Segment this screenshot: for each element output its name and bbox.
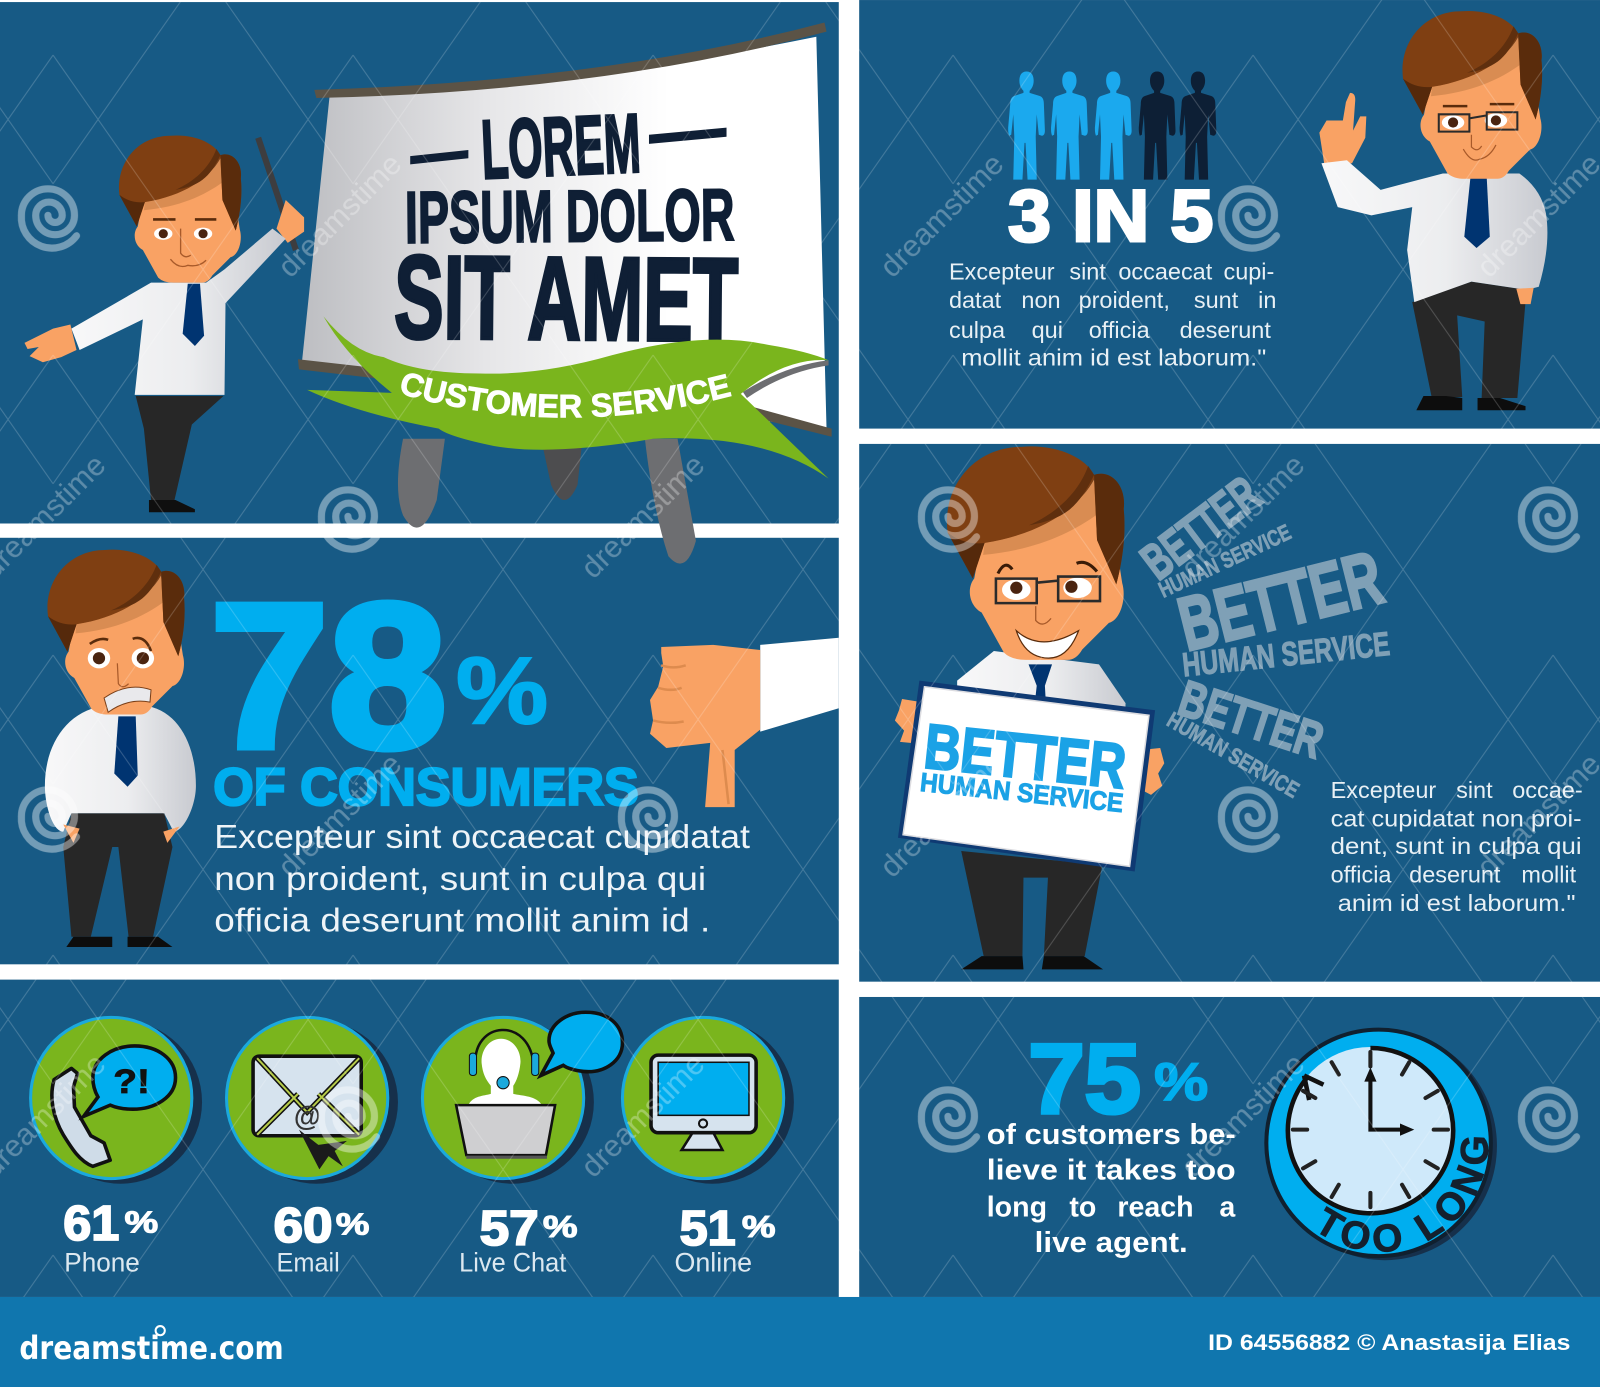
- stat: 75%: 75: [1029, 1023, 1141, 1133]
- ribbon label: CUSTOMER SERVICE: [401, 373, 732, 418]
- banner on easel: [298, 22, 832, 564]
- stat: 78%: [210, 560, 548, 791]
- icon: phone: ?!: [113, 1063, 150, 1101]
- icon: email: @: [294, 1101, 321, 1132]
- body text: lieve it takes too: [987, 1155, 1236, 1187]
- panel: 75% too long: [987, 1023, 1497, 1260]
- icon: thumbs down: [650, 638, 839, 807]
- icon: online monitor: [622, 1017, 794, 1184]
- ghost slogan: middle: [1171, 536, 1392, 685]
- body text: cat cupidatat non proi-: [1331, 806, 1582, 832]
- character: smiling man with sign: [895, 446, 1164, 969]
- heading: of consumers: OF CONSUMERS: [213, 758, 639, 817]
- character: presenter: [24, 135, 304, 512]
- stat: phone: %: [124, 1206, 158, 1240]
- body text: Excepteur: [1331, 777, 1436, 803]
- body text: deserunt: [1409, 862, 1501, 888]
- stat: 78%: 78: [210, 560, 447, 791]
- ghost slogan: bottom: BETTER: [1172, 670, 1330, 769]
- body text: long: [987, 1191, 1047, 1223]
- stat: email: 60: [273, 1199, 333, 1253]
- stat: online: %: [742, 1210, 776, 1244]
- body text: sint: [1456, 777, 1493, 803]
- stat: live chat: [459, 1202, 578, 1277]
- body text: [949, 259, 1276, 370]
- stat: email: [273, 1199, 369, 1277]
- body text: reach: [1117, 1191, 1194, 1223]
- stat: live chat: 57: [480, 1202, 539, 1256]
- ghost slogan: middle: BETTER: [1171, 536, 1391, 668]
- body text: officia deserunt mollit anim id .: [214, 903, 710, 940]
- panel: 3 in 5: [949, 11, 1547, 410]
- body text: Excepteur: [949, 259, 1055, 285]
- character: man with raised finger: [1319, 11, 1547, 410]
- body text: sunt: [1194, 287, 1239, 313]
- watermark overlay: dreamstime: [574, 448, 711, 585]
- body text: in: [1258, 287, 1276, 313]
- body text: qui: [1032, 317, 1063, 343]
- banner title: [394, 96, 739, 367]
- footer bar: [0, 1297, 1600, 1387]
- stat: 75%: [1029, 1023, 1208, 1133]
- stat: email: Email: [277, 1247, 340, 1277]
- watermark overlay: dreamstime: [1174, 1047, 1311, 1184]
- body text: datat: [949, 287, 1002, 313]
- footer logo: dreamstime.com: [19, 1331, 284, 1367]
- ghost slogan: middle: HUMAN SERVICE: [1181, 626, 1392, 685]
- body text: anim id est laborum.": [1338, 890, 1576, 916]
- body text: non: [1021, 287, 1061, 313]
- body text: cupi-: [1223, 259, 1274, 285]
- icon: live chat: [422, 1012, 622, 1184]
- green ribbon: [307, 316, 829, 478]
- panel: 78% of consumers: [45, 550, 839, 947]
- body text: proident,: [1079, 287, 1170, 313]
- icon: clock too long: [1264, 1028, 1497, 1260]
- watermark overlay: dreamstime: [271, 747, 408, 884]
- body text: of customers be-: [987, 1119, 1236, 1151]
- stat: 78%: %: [456, 639, 548, 745]
- ghost slogan: top: [1130, 465, 1295, 603]
- stat: online: Online: [674, 1247, 752, 1277]
- body text: to: [1069, 1191, 1096, 1223]
- sign board: BETTER: [921, 712, 1129, 802]
- panel: channel statistics: [31, 1012, 794, 1277]
- body text: Excepteur sint occaecat cupidatat: [214, 819, 751, 856]
- ghost slogan: top: BETTER: [1130, 465, 1271, 590]
- watermark overlay: dreamstime: [873, 747, 1010, 884]
- body text: occae-: [1512, 777, 1583, 803]
- watermark overlay: dreamstime: [574, 1047, 711, 1184]
- icon: phone: [31, 1017, 202, 1184]
- body text: officia: [1089, 317, 1151, 343]
- stat: phone: Phone: [64, 1247, 140, 1277]
- stat: phone: [63, 1197, 158, 1277]
- body text: a: [1219, 1191, 1236, 1223]
- ghost slogan: bottom: HUMAN SERVICE: [1163, 707, 1303, 803]
- clock label: TOO LONG: [1320, 1137, 1488, 1252]
- character: sad man: [45, 550, 196, 947]
- stat: 75%: %: [1154, 1053, 1208, 1112]
- ghost slogan: top: HUMAN SERVICE: [1155, 519, 1295, 603]
- sign board: HUMAN SERVICE: [919, 767, 1125, 818]
- panel: presenter with banner: [24, 22, 832, 564]
- stat: live chat: Live Chat: [459, 1247, 567, 1277]
- stat: online: [674, 1202, 776, 1277]
- sign board: [895, 681, 1164, 871]
- stat: phone: 61: [63, 1197, 119, 1251]
- body text: mollit anim id est laborum.": [961, 344, 1266, 370]
- footer credit: ID 64556882 © Anastasija Elias: [1208, 1330, 1570, 1355]
- body text: culpa: [949, 317, 1006, 343]
- banner title: SIT AMET: [394, 232, 739, 367]
- body text: dent, sunt in culpa qui: [1331, 833, 1582, 859]
- body text: officia: [1331, 862, 1392, 888]
- body text: live agent.: [1035, 1227, 1188, 1259]
- panel: better human service: [895, 446, 1583, 969]
- body text: occaecat: [1118, 259, 1213, 285]
- watermark overlay: dreamstime: [873, 147, 1010, 284]
- icon: email: [227, 1017, 398, 1184]
- body text: [987, 1119, 1236, 1259]
- heading: 3 in 5: 3 IN 5: [1008, 174, 1213, 257]
- icon: five silhouettes: [1008, 71, 1216, 180]
- body text: deserunt: [1180, 317, 1271, 343]
- body text: [1331, 777, 1583, 916]
- banner sheet: [302, 37, 827, 429]
- banner title: IPSUM DOLOR: [405, 173, 735, 259]
- easel legs: [398, 439, 696, 564]
- banner title: LOREM: [479, 96, 642, 197]
- body text: non proident, sunt in culpa qui: [214, 861, 706, 898]
- ghost slogan: bottom: [1163, 670, 1330, 803]
- body text: [214, 819, 751, 940]
- watermark overlay: dreamstime: [271, 147, 408, 284]
- watermark overlay: dreamstime: [1174, 448, 1311, 585]
- stat: online: 51: [680, 1202, 736, 1256]
- stat: email: %: [336, 1208, 369, 1242]
- body text: sint: [1069, 259, 1106, 285]
- body text: mollit: [1521, 862, 1577, 888]
- stat: live chat: %: [543, 1210, 578, 1244]
